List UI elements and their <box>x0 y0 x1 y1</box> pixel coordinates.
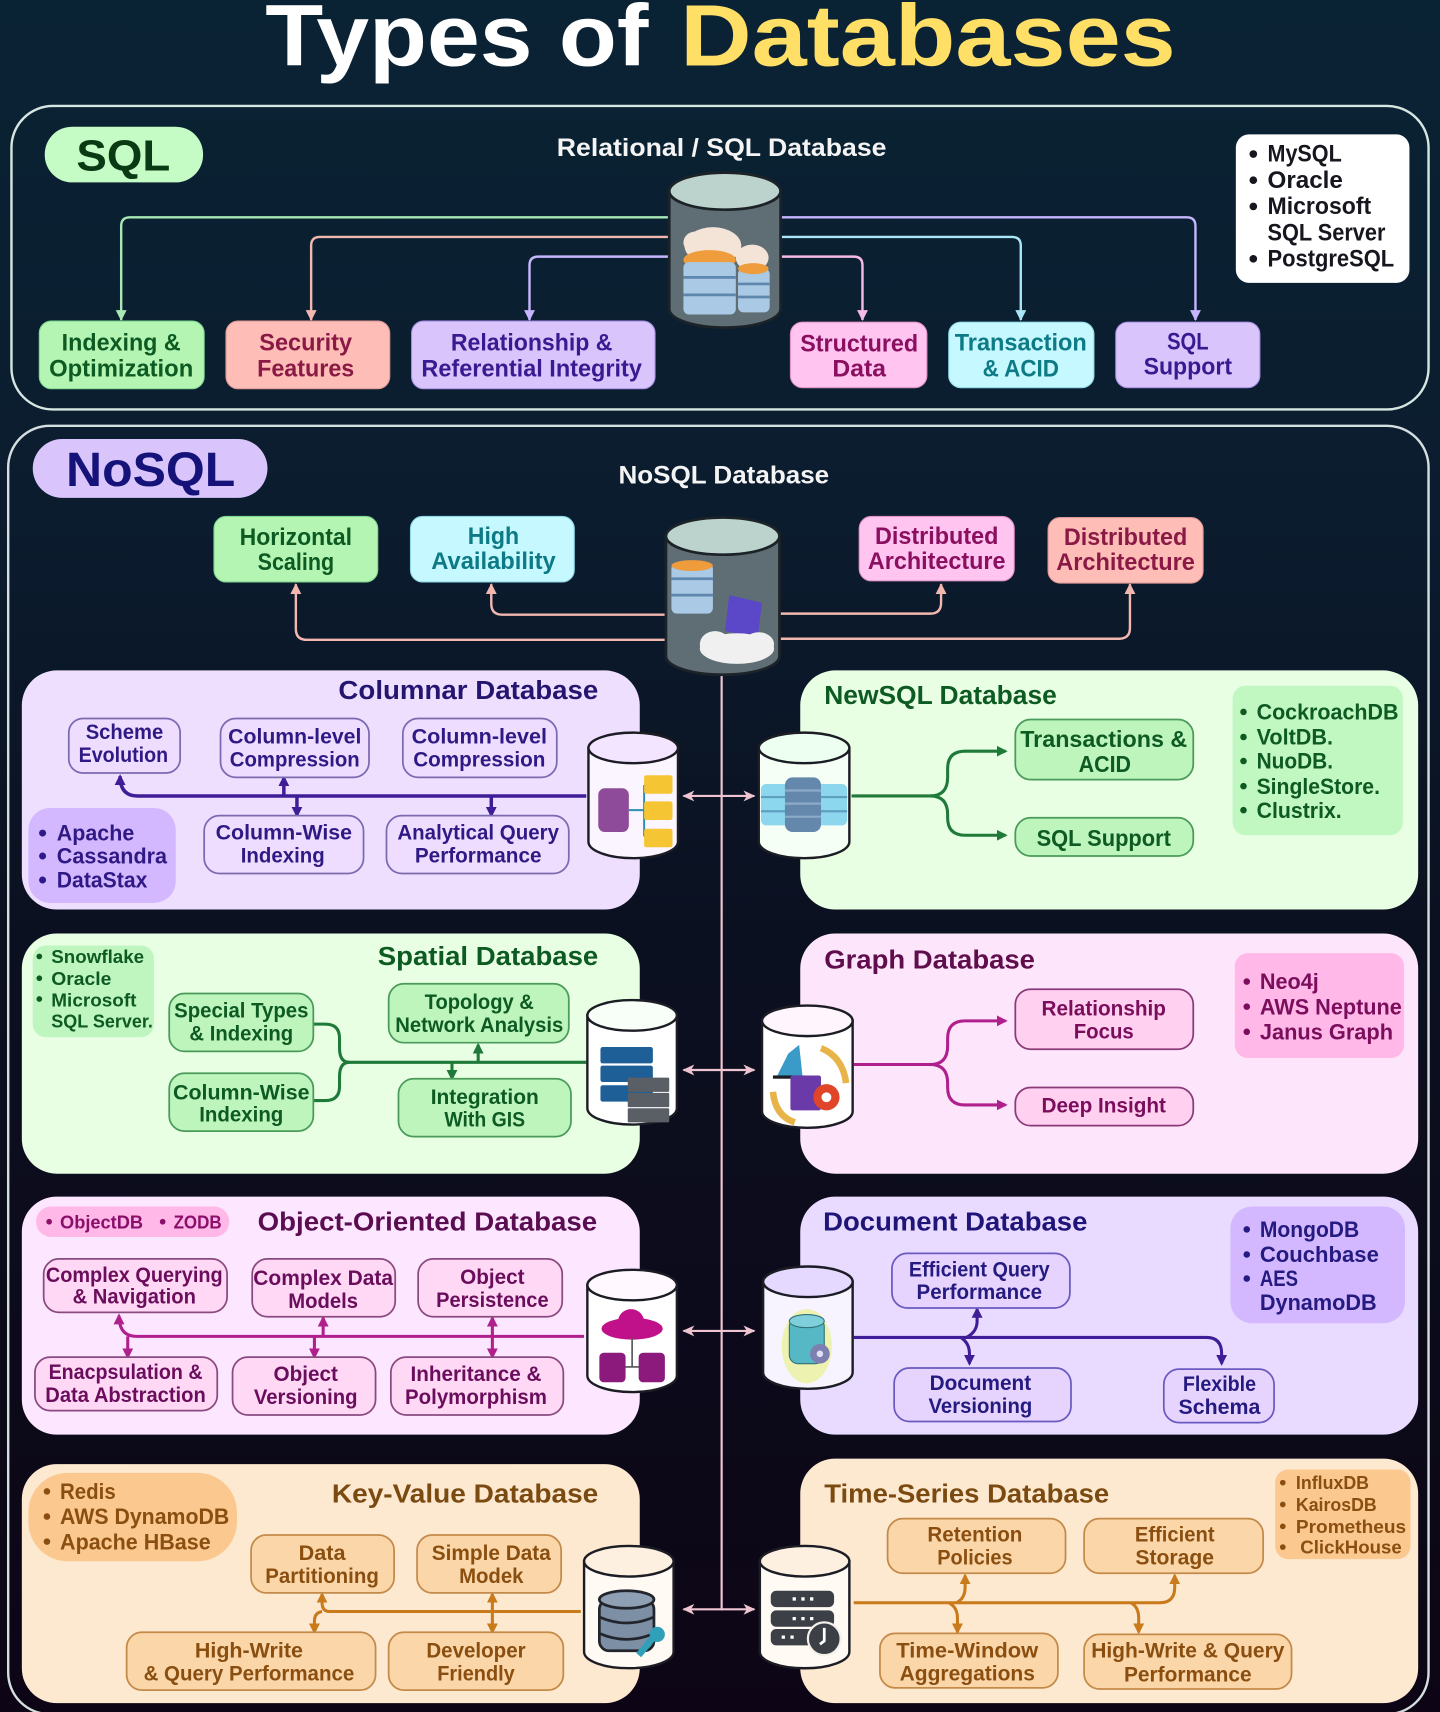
list: document vendors: AES <box>1260 1266 1298 1291</box>
list: SQL vendors: Microsoft <box>1268 193 1371 220</box>
box: object persistence: Persistence <box>436 1288 549 1312</box>
box: security features: Security <box>259 330 353 357</box>
box: topology and network analysis: Topology & <box>425 990 534 1014</box>
box: retention policies <box>888 1519 1066 1573</box>
box: column-wise indexing <box>169 1073 313 1131</box>
box: inheritance and polymorphism: Polymorphism <box>405 1385 547 1409</box>
box: object versioning: Object <box>273 1362 338 1386</box>
box: horizontal scaling: Scaling <box>258 549 334 576</box>
badge: SQL: SQL <box>76 131 170 180</box>
box: distributed architecture pink <box>859 516 1014 581</box>
box: special types and indexing: Special Types <box>174 999 308 1023</box>
box: security features <box>226 321 390 389</box>
box: distributed architecture salmon: Distributed <box>1064 524 1187 551</box>
box: efficient query performance: Efficient Query <box>909 1257 1050 1281</box>
box: column-level compression 2 <box>403 718 557 777</box>
box: column-wise indexing: Column-Wise <box>216 821 352 845</box>
box: transaction and ACID: Transaction <box>955 330 1087 357</box>
box: relationship focus <box>1015 989 1193 1049</box>
box: horizontal scaling <box>214 516 378 582</box>
list: NewSQL vendors <box>1233 686 1403 835</box>
box: column-wise indexing: Indexing <box>241 844 325 868</box>
box: document versioning: Document <box>930 1371 1031 1395</box>
heading: relational database: Relational / SQL Database <box>557 134 887 162</box>
box: SQL support: SQL <box>1167 328 1209 355</box>
box: simple data model: Simple Data <box>432 1541 551 1565</box>
box: inheritance and polymorphism: Inheritance & <box>410 1362 542 1386</box>
heading: Columnar Database <box>338 675 598 705</box>
list: SQL vendors: Oracle <box>1268 167 1343 194</box>
box: scheme evolution: Scheme <box>86 720 163 744</box>
panel: graph database <box>762 934 1418 1174</box>
box: transactions and ACID: ACID <box>1079 751 1131 777</box>
box: developer friendly: Developer <box>426 1638 526 1662</box>
connectors <box>119 1316 584 1357</box>
box: efficient storage: Efficient <box>1135 1523 1215 1547</box>
list: SQL vendors <box>1236 134 1409 283</box>
box: relationship and referential integrity: Relationship & <box>451 330 612 357</box>
box: structured data: Structured <box>800 331 918 358</box>
box: high-write and query performance: Performance <box>1124 1662 1252 1686</box>
box: distributed architecture salmon: Architecture <box>1056 549 1195 576</box>
list: spatial vendors <box>33 946 154 1037</box>
list: document vendors: MongoDB <box>1260 1217 1359 1242</box>
list: time-series vendors: KairosDB <box>1296 1494 1377 1515</box>
box: flexible schema <box>1164 1369 1274 1423</box>
box: indexing and optimization: Indexing & <box>62 330 181 357</box>
list: object vendors <box>36 1206 229 1237</box>
box: data partitioning: Partitioning <box>265 1564 379 1588</box>
list: key-value vendors <box>28 1473 237 1561</box>
box: encapsulation and data abstraction: Data Abstraction <box>45 1383 206 1407</box>
box: developer friendly: Friendly <box>437 1661 515 1685</box>
list: time-series vendors: InfluxDB <box>1296 1472 1369 1493</box>
box: topology and network analysis <box>389 984 569 1043</box>
box: time-window aggregations: Aggregations <box>900 1661 1035 1685</box>
icon: NoSQL database cylinder <box>666 518 779 675</box>
list: SQL vendors: MySQL <box>1268 141 1342 168</box>
box: high availability: High <box>468 523 519 550</box>
list: columnar vendors <box>28 808 176 903</box>
connectors: SQL features <box>121 217 1195 320</box>
list: object vendors: ObjectDB <box>60 1211 143 1232</box>
panel: NoSQL <box>8 426 1429 1712</box>
list: spatial vendors: Microsoft <box>51 990 136 1011</box>
box: high availability <box>410 516 574 582</box>
panel: key-value database <box>22 1464 674 1703</box>
box: high-write and query performance <box>1084 1634 1292 1689</box>
box: object persistence <box>418 1259 562 1317</box>
box: SQL support: SQL Support <box>1037 825 1171 851</box>
box: distributed architecture pink: Distributed <box>875 523 998 550</box>
box: time-window aggregations: Time-Window <box>896 1638 1039 1662</box>
box: inheritance and polymorphism <box>391 1357 563 1415</box>
box: analytical query performance: Analytical Query <box>397 821 559 845</box>
list: columnar vendors: Cassandra <box>57 844 168 869</box>
box: column-wise indexing <box>204 816 364 873</box>
box: topology and network analysis: Network Analysis <box>395 1013 563 1037</box>
list: NewSQL vendors: Clustrix. <box>1257 798 1342 823</box>
list: spatial vendors: Oracle <box>51 968 111 989</box>
panel outline: NoSQL <box>8 426 1429 1712</box>
list: time-series vendors: Prometheus <box>1296 1516 1406 1537</box>
box: complex querying and navigation <box>44 1259 227 1312</box>
box: transaction and ACID: & ACID <box>983 356 1059 383</box>
box: analytical query performance <box>386 816 569 873</box>
box: column-wise indexing: Column-Wise <box>173 1080 310 1104</box>
list: document vendors: DynamoDB <box>1260 1290 1377 1315</box>
box: indexing and optimization: Optimization <box>49 356 193 383</box>
box: efficient query performance <box>892 1253 1070 1308</box>
box: column-level compression 1: Compression <box>230 747 360 771</box>
box: SQL support: Support <box>1144 354 1232 381</box>
box: column-level compression 2: Compression <box>413 747 545 771</box>
box: deep insight: Deep Insight <box>1042 1094 1166 1118</box>
box: efficient query performance: Performance <box>917 1280 1042 1304</box>
heading: Graph Database <box>824 944 1035 974</box>
connectors <box>854 1021 1005 1105</box>
box: simple data model: Modek <box>459 1564 524 1588</box>
box: structured data: Data <box>832 356 887 383</box>
heading: Document Database <box>823 1206 1087 1236</box>
box: high-write and query performance <box>127 1632 376 1690</box>
box: complex data models: Complex Data <box>253 1266 393 1290</box>
panel background <box>22 1197 640 1435</box>
box: complex data models <box>252 1259 395 1317</box>
icon: SQL database cylinder <box>669 173 781 328</box>
list: document vendors: Couchbase <box>1260 1242 1379 1267</box>
badge: NoSQL: NoSQL <box>66 444 235 497</box>
list: key-value vendors: Redis <box>60 1479 116 1504</box>
list: spatial vendors: Snowflake <box>51 946 144 967</box>
title <box>265 0 1176 85</box>
box: transaction and ACID <box>949 322 1094 388</box>
badge: SQL <box>45 127 203 182</box>
icon: columnar cylinder <box>588 733 678 858</box>
box: relationship focus: Relationship <box>1042 996 1166 1020</box>
box: horizontal scaling: Horizontal <box>240 524 352 551</box>
connectors <box>854 1575 1175 1632</box>
box: relationship and referential integrity <box>412 321 655 389</box>
box: scheme evolution <box>69 718 180 773</box>
panel: NewSQL database <box>759 670 1418 909</box>
box: time-window aggregations <box>880 1633 1058 1688</box>
panel: columnar database <box>22 670 678 909</box>
box: encapsulation and data abstraction: Enacpsulation & <box>49 1360 203 1384</box>
panel background <box>800 1459 1418 1703</box>
icon: key-value cylinder <box>584 1546 674 1668</box>
list: spatial vendors: SQL Server. <box>51 1010 153 1031</box>
box: flexible schema: Schema <box>1179 1395 1261 1419</box>
list: SQL vendors: SQL Server <box>1268 219 1385 246</box>
panel background <box>800 670 1418 909</box>
box: column-wise indexing: Indexing <box>199 1102 283 1126</box>
panel background <box>800 1197 1418 1435</box>
box: scheme evolution: Evolution <box>79 743 168 767</box>
panel: spatial database <box>22 934 677 1174</box>
panel background <box>22 670 640 909</box>
box: developer friendly <box>389 1632 563 1690</box>
panel background <box>800 934 1418 1174</box>
box: high-write and query performance: & Query Performance <box>144 1661 354 1685</box>
box: integration with GIS: With GIS <box>444 1108 525 1132</box>
box: retention policies: Policies <box>937 1546 1013 1570</box>
box: SQL support <box>1015 818 1193 856</box>
box: encapsulation and data abstraction <box>35 1357 217 1411</box>
list: NewSQL vendors: NuoDB. <box>1257 749 1333 774</box>
box: complex data models: Models <box>288 1289 358 1313</box>
list: document vendors <box>1230 1206 1405 1323</box>
connectors <box>313 1024 586 1101</box>
badge: NoSQL <box>33 439 267 498</box>
connector: central spine and branches <box>683 671 754 1610</box>
list: columnar vendors: Apache <box>57 821 134 846</box>
box: document versioning: Versioning <box>929 1394 1032 1418</box>
box: SQL support <box>1116 322 1260 388</box>
box: high availability: Availability <box>431 548 556 575</box>
box: special types and indexing: & Indexing <box>189 1022 293 1046</box>
box: indexing and optimization <box>39 321 204 389</box>
box: document versioning <box>894 1368 1071 1422</box>
box: structured data <box>790 322 927 388</box>
panel background <box>22 934 640 1174</box>
panel background <box>22 1464 640 1703</box>
connectors <box>120 776 586 816</box>
box: analytical query performance: Performance <box>415 844 542 868</box>
heading: Key-Value Database <box>332 1478 598 1508</box>
box: data partitioning: Data <box>299 1541 346 1565</box>
box: efficient storage <box>1084 1519 1263 1573</box>
list: time-series vendors <box>1275 1470 1411 1559</box>
heading: NoSQL database: NoSQL Database <box>618 462 829 490</box>
connectors <box>854 1309 1222 1364</box>
panel outline: SQL <box>11 106 1429 409</box>
list: object vendors: ZODB <box>174 1211 222 1232</box>
box: security features: Features <box>257 356 354 383</box>
box: relationship focus: Focus <box>1074 1019 1134 1043</box>
icon: spatial cylinder <box>587 1000 677 1125</box>
connectors: NoSQL features <box>296 584 1130 640</box>
box: special types and indexing <box>169 994 313 1051</box>
box: column-level compression 1 <box>221 718 369 777</box>
box: column-level compression 1: Column-level <box>228 725 361 749</box>
list: key-value vendors: Apache HBase <box>60 1529 211 1554</box>
list: time-series vendors: ClickHouse <box>1300 1537 1402 1558</box>
box: flexible schema: Flexible <box>1183 1372 1256 1396</box>
connectors <box>852 751 1005 835</box>
icon: document cylinder <box>763 1266 853 1389</box>
box: data partitioning <box>251 1535 394 1593</box>
panel: document database <box>763 1197 1418 1435</box>
box: column-level compression 2: Column-level <box>412 725 547 749</box>
list: NewSQL vendors: CockroachDB <box>1257 700 1399 725</box>
list: NewSQL vendors: SingleStore. <box>1257 774 1380 799</box>
list: NewSQL vendors: VoltDB. <box>1257 725 1333 750</box>
icon: object cylinder <box>587 1270 677 1392</box>
heading: Object-Oriented Database <box>258 1206 597 1236</box>
box: complex querying and navigation: Complex Querying <box>46 1263 223 1287</box>
box: distributed architecture salmon <box>1048 518 1203 583</box>
panel: time-series database <box>760 1459 1418 1703</box>
icon: time-series cylinder <box>760 1546 849 1668</box>
heading: Time-Series Database <box>824 1478 1109 1508</box>
box: complex querying and navigation: & Navigation <box>73 1285 196 1309</box>
list: graph vendors: Neo4j <box>1260 969 1319 994</box>
box: deep insight <box>1015 1087 1193 1126</box>
list: SQL vendors: PostgreSQL <box>1268 245 1394 272</box>
connectors <box>314 1594 581 1632</box>
box: object versioning <box>233 1357 376 1415</box>
box: object versioning: Versioning <box>254 1385 358 1409</box>
box: retention policies: Retention <box>927 1523 1022 1547</box>
heading: NewSQL Database <box>824 680 1057 710</box>
panel: object-oriented database <box>22 1197 677 1435</box>
icon: NewSQL cylinder <box>759 733 849 858</box>
panel: SQL <box>11 106 1429 409</box>
box: object persistence: Object <box>460 1265 525 1289</box>
box: efficient storage: Storage <box>1135 1546 1214 1570</box>
list: graph vendors <box>1235 953 1404 1058</box>
box: integration with GIS <box>398 1079 571 1137</box>
box: simple data model <box>417 1535 561 1593</box>
box: high-write and query performance: High-Write <box>195 1638 303 1662</box>
box: transactions and ACID: Transactions & <box>1020 726 1187 752</box>
box: integration with GIS: Integration <box>431 1085 539 1109</box>
box: transactions and ACID <box>1015 720 1193 780</box>
box: distributed architecture pink: Architecture <box>868 548 1005 575</box>
box: relationship and referential integrity: Referential Integrity <box>421 356 643 383</box>
box: high-write and query performance: High-Write & Query <box>1091 1638 1285 1662</box>
list: key-value vendors: AWS DynamoDB <box>60 1504 229 1529</box>
list: graph vendors: Janus Graph <box>1260 1019 1393 1044</box>
list: graph vendors: AWS Neptune <box>1260 994 1402 1019</box>
icon: graph cylinder <box>762 1006 853 1128</box>
heading: Spatial Database <box>378 941 598 971</box>
list: columnar vendors: DataStax <box>57 868 147 893</box>
